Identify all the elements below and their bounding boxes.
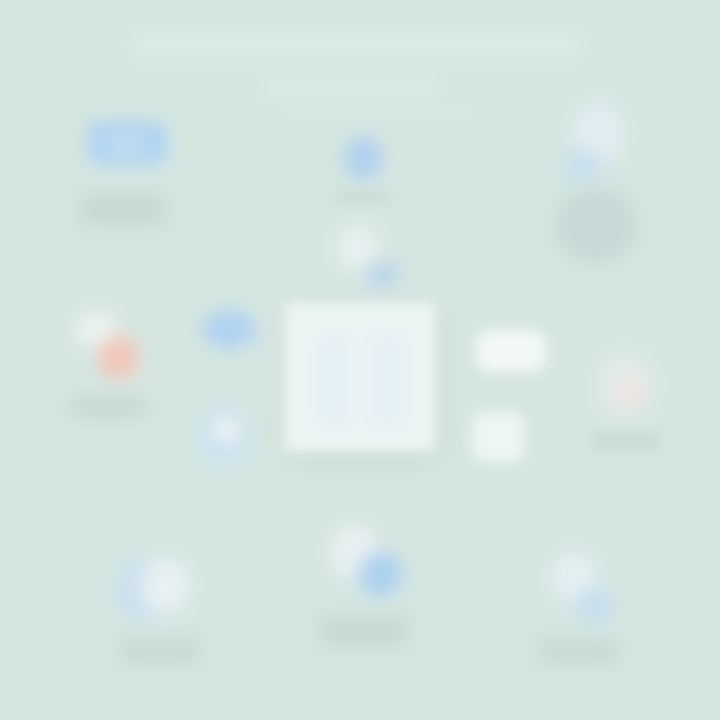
icon: top right [562,102,624,184]
icon: upper centre connector [336,224,399,288]
chart: central columns [318,335,404,425]
icon: right pair upper [476,330,546,372]
label: left [70,396,146,418]
icon: bottom right [552,552,614,624]
icon: bottom left [114,558,190,622]
title [135,34,580,96]
icon: right person [598,353,654,417]
icon: left pair lower [198,406,250,466]
panel: central board [282,302,442,462]
label: right [592,432,658,450]
subtitle [290,108,470,118]
label: top centre [336,190,390,204]
icon: bottom centre [330,524,402,596]
label: top left [80,194,166,226]
icon: left pair upper [202,310,256,348]
icon: top centre [344,136,382,180]
label: bottom left [120,638,200,664]
icon: top left cloud [88,122,166,164]
label: top right [554,188,638,264]
icon: left person [75,311,138,379]
label: bottom centre [320,616,408,646]
label: bottom right [538,638,618,664]
icon: right pair lower [472,412,524,462]
